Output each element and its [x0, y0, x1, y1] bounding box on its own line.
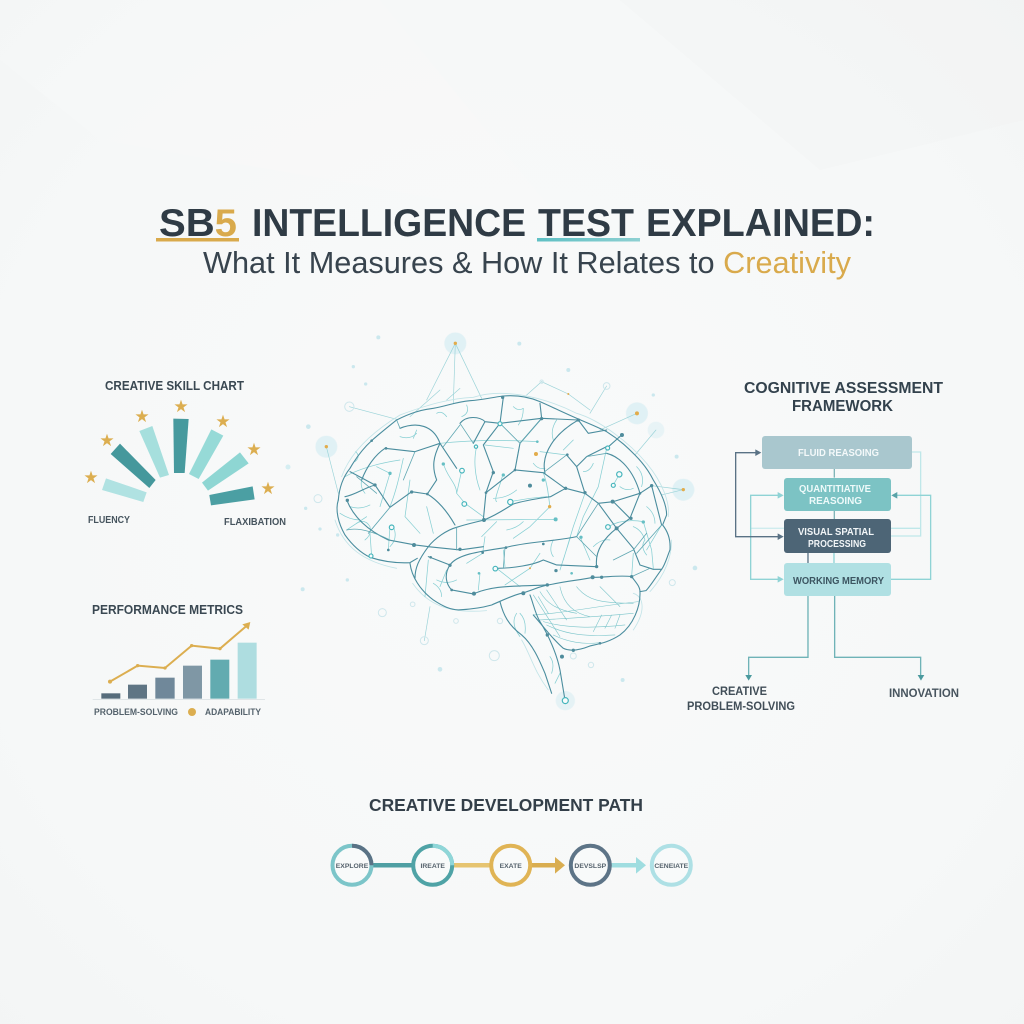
gold stars: ★ — [260, 479, 276, 498]
floating particles — [301, 335, 697, 682]
heading: creative skill chart: CREATIVE SKILL CHART — [105, 379, 244, 393]
heading: creative development path: CREATIVE DEVELOPMENT PATH — [369, 795, 643, 815]
panel: performance metrics — [92, 603, 265, 718]
label: creative problem-solving — [687, 684, 795, 713]
teal underline — [537, 238, 640, 242]
step: generate: CENEIATE — [654, 863, 689, 870]
gold underline — [156, 238, 239, 242]
box: visual spatial processing — [784, 519, 891, 553]
brain network illustration — [301, 332, 697, 710]
gold stars — [83, 397, 276, 498]
panel: creative skill chart — [83, 379, 290, 528]
label: fluency: FLUENCY — [88, 514, 130, 526]
gold stars: ★ — [246, 440, 262, 459]
connector arrows — [736, 449, 931, 681]
box: fluid reasoning — [762, 436, 912, 469]
step: develop: DEVSLSP — [574, 863, 607, 870]
title word: EXPLAINED: EXPLAINED: — [646, 202, 875, 245]
label: innovation: INNOVATION — [889, 686, 959, 700]
trend line arrow — [108, 622, 250, 684]
gold stars: ★ — [99, 431, 115, 450]
gold stars: ★ — [173, 397, 189, 416]
panel: creative development path — [332, 795, 691, 885]
step: generate — [652, 846, 691, 885]
light inner network — [340, 405, 662, 683]
title word: SB5: SB5 — [159, 202, 237, 245]
step: ideate: IREATE — [420, 863, 445, 870]
cerebellum fan lines — [533, 587, 638, 643]
gold nodes — [325, 342, 685, 569]
box: working memory: WORKING MEMORY — [793, 576, 884, 587]
title word: INTELLIGENCE: INTELLIGENCE — [252, 202, 526, 245]
title — [156, 202, 875, 245]
step: develop — [571, 846, 610, 885]
heading: cognitive assessment framework: FRAMEWORK — [792, 398, 893, 415]
box: fluid reasoning: FLUID REASOING — [798, 448, 879, 459]
network nodes — [346, 396, 653, 659]
legend dot — [188, 708, 196, 716]
box: working memory — [784, 563, 891, 596]
faint outer contour echoes — [335, 393, 672, 690]
radial bars — [102, 419, 255, 505]
glow halos — [315, 332, 694, 710]
label: creative problem-solving: PROBLEM-SOLVING — [687, 699, 795, 713]
subtitle: What It Measures & How It Relates to Creativity — [203, 245, 851, 280]
label: adapability: ADAPABILITY — [205, 707, 262, 718]
label: problem-solving: PROBLEM-SOLVING — [94, 707, 178, 718]
box: quantitative reasoning — [784, 478, 891, 511]
box: quantitative reasoning: QUANTITIATIVE — [799, 484, 871, 495]
step: explore — [332, 846, 372, 885]
step: explore: EXPLORE — [336, 863, 369, 870]
label: flaxibation: FLAXIBATION — [224, 516, 286, 528]
step: ideate — [413, 846, 452, 885]
title word: TEST: TEST — [538, 202, 634, 245]
box: quantitative reasoning: REASOING — [809, 496, 862, 507]
step: exate: EXATE — [500, 863, 522, 870]
outside connector lines — [326, 343, 683, 641]
gold stars: ★ — [215, 412, 231, 431]
box: visual spatial processing: PROCESSING — [808, 539, 866, 550]
label: creative problem-solving: CREATIVE — [712, 684, 767, 698]
bar chart — [93, 643, 265, 700]
connectors — [372, 857, 646, 874]
step: exate — [491, 846, 530, 885]
ring nodes — [314, 380, 675, 668]
main brain contour and folds — [337, 396, 670, 700]
secondary folds — [347, 419, 662, 577]
heading: cognitive assessment framework: COGNITIVE ASSESSMENT — [744, 380, 943, 397]
heading: performance metrics: PERFORMANCE METRICS — [92, 603, 243, 617]
gold stars: ★ — [134, 407, 150, 426]
heading: cognitive assessment framework — [744, 380, 943, 415]
gold stars: ★ — [83, 468, 99, 487]
panel: cognitive assessment framework — [687, 380, 959, 713]
box: visual spatial processing: VISUAL SPATIAL — [798, 527, 874, 538]
